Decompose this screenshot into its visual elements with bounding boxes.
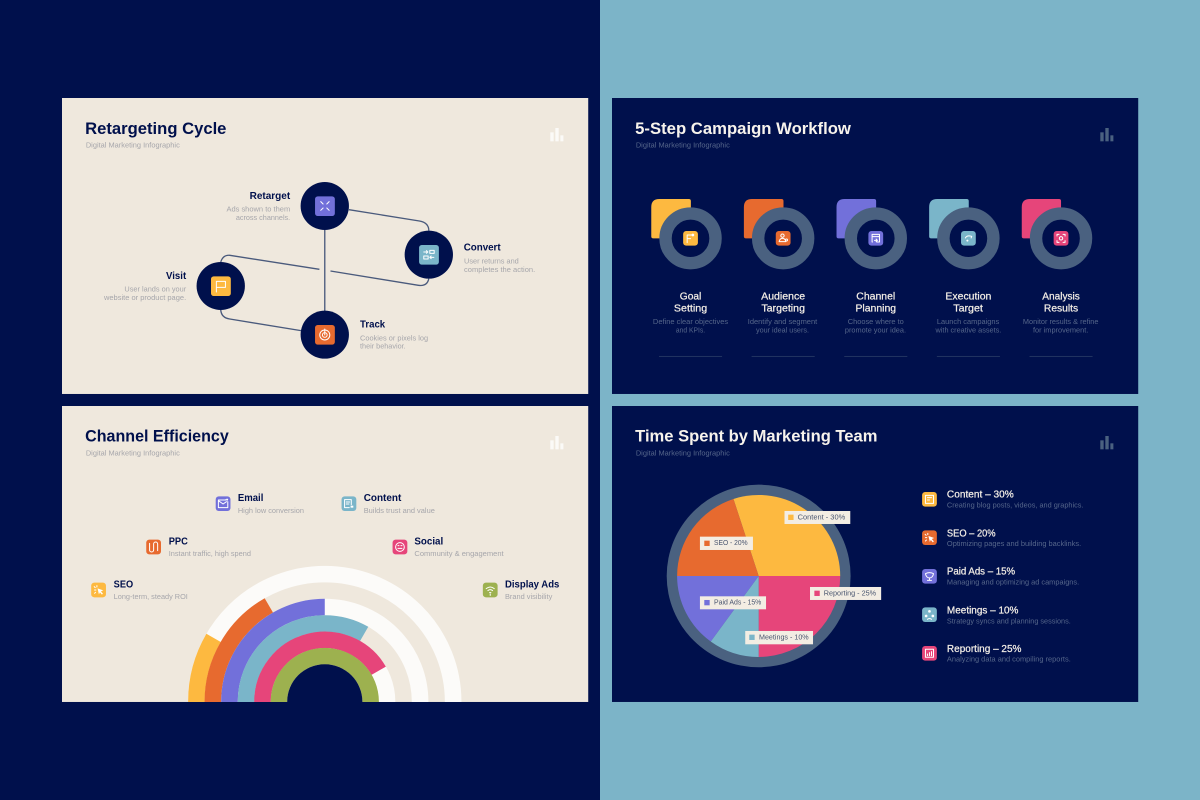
item: display ads xyxy=(483,579,559,601)
step 4: execution target: Launch campaigns xyxy=(937,317,1000,326)
subtitle: Digital Marketing Infographic xyxy=(636,141,730,150)
icon: bars xyxy=(550,436,563,449)
pie label: seo xyxy=(700,537,753,550)
legend: meetings: Strategy syncs and planning sessions. xyxy=(947,616,1071,625)
heading: 5-Step Campaign Workflow xyxy=(635,119,852,138)
node: track: their behavior. xyxy=(360,342,406,351)
node: retarget: Ads shown to them xyxy=(226,205,290,214)
concentric radial chart xyxy=(188,566,462,702)
item: ppc: Instant traffic, high spend xyxy=(169,549,251,558)
heading: Channel Efficiency xyxy=(85,427,229,446)
panel: retargeting cycle xyxy=(62,98,588,394)
item: email xyxy=(216,493,304,515)
node: track xyxy=(301,311,428,359)
pie label: paid ads: Paid Ads - 15% xyxy=(714,597,762,606)
panel: channel efficiency xyxy=(62,406,588,702)
legend: content: Content – 30% xyxy=(947,489,1014,500)
step 3: channel planning: Planning xyxy=(855,303,896,314)
icon: bars xyxy=(550,128,563,141)
item: seo: SEO xyxy=(114,579,134,590)
step 2: audience targeting: your ideal users. xyxy=(756,326,809,335)
legend: meetings xyxy=(922,605,1071,625)
step 1: goal setting: Define clear objectives xyxy=(653,317,728,326)
subtitle: Digital Marketing Infographic xyxy=(86,449,180,458)
legend: seo xyxy=(922,528,1081,548)
pie label: meetings xyxy=(745,631,813,644)
step 1: goal setting: Setting xyxy=(674,303,707,314)
step 5: analysis results: Results xyxy=(1044,303,1078,314)
node: retarget xyxy=(226,182,349,230)
step 4: execution target: Execution xyxy=(945,291,991,302)
node: visit: website or product page. xyxy=(103,293,186,302)
legend: reporting: Reporting – 25% xyxy=(947,644,1022,655)
step 1: goal setting: Goal xyxy=(680,291,701,302)
item: ppc: PPC xyxy=(169,536,188,547)
node: visit: User lands on your xyxy=(124,285,187,294)
step 2: audience targeting: Targeting xyxy=(761,303,805,314)
item: content: Content xyxy=(364,493,402,504)
item: email: Email xyxy=(238,493,263,504)
step 5: analysis results: Monitor results & refine xyxy=(1023,317,1098,326)
node: track: Track xyxy=(360,320,386,331)
heading: Retargeting Cycle xyxy=(85,119,226,138)
background: right teal half xyxy=(600,0,1200,800)
step 5: analysis results: for improvement. xyxy=(1033,326,1088,335)
legend: seo: SEO – 20% xyxy=(947,528,996,539)
pie label: meetings: Meetings - 10% xyxy=(759,632,809,641)
step 3: channel planning xyxy=(837,199,907,357)
pie label: content: Content - 30% xyxy=(798,512,846,521)
legend: content xyxy=(922,489,1084,510)
step 3: channel planning: promote your idea. xyxy=(845,326,906,335)
item: content xyxy=(342,493,435,515)
legend: paid ads: Paid Ads – 15% xyxy=(947,567,1015,578)
item: seo: Long-term, steady ROI xyxy=(114,592,188,601)
step 3: channel planning: Choose where to xyxy=(848,317,904,326)
pie chart xyxy=(667,485,881,667)
pie label: reporting: Reporting - 25% xyxy=(824,588,877,597)
item: display ads: Display Ads xyxy=(505,579,559,590)
subtitle: Digital Marketing Infographic xyxy=(86,141,180,150)
legend: paid ads xyxy=(922,567,1079,587)
step 5: analysis results: Analysis xyxy=(1042,291,1080,302)
pie label: content xyxy=(784,511,850,524)
panel: 5-step campaign workflow xyxy=(612,98,1138,394)
node: convert: User returns and xyxy=(464,256,519,265)
step 1: goal setting xyxy=(651,199,728,357)
heading: Time Spent by Marketing Team xyxy=(635,427,877,446)
item: social: Community & engagement xyxy=(414,549,504,558)
legend: content: Creating blog posts, videos, and graphics. xyxy=(947,501,1084,510)
step 2: audience targeting xyxy=(744,199,818,357)
pie label: seo: SEO - 20% xyxy=(714,538,748,547)
item: social xyxy=(393,536,504,558)
step 1: goal setting: and KPIs. xyxy=(676,326,705,335)
node: retarget: across channels. xyxy=(236,213,290,222)
icon: bars xyxy=(1100,128,1113,141)
step 4: execution target: with creative assets. xyxy=(935,326,1001,335)
node: convert: completes the action. xyxy=(464,265,535,274)
panel: time spent by marketing team xyxy=(612,406,1138,702)
node: convert: Convert xyxy=(464,243,501,254)
item: seo xyxy=(91,579,188,601)
icon: bars xyxy=(1100,436,1113,449)
node: visit: Visit xyxy=(166,271,187,282)
step 2: audience targeting: Audience xyxy=(761,291,806,302)
item: display ads: Brand visibility xyxy=(505,592,553,601)
item: ppc xyxy=(146,536,251,558)
item: email: High low conversion xyxy=(238,506,304,515)
legend: seo: Optimizing pages and building backlinks. xyxy=(947,539,1081,548)
legend: reporting xyxy=(922,644,1071,664)
step 5: analysis results xyxy=(1022,199,1098,357)
legend: meetings: Meetings – 10% xyxy=(947,605,1018,616)
subtitle: Digital Marketing Infographic xyxy=(636,449,730,458)
step 4: execution target xyxy=(929,199,1001,357)
item: social: Social xyxy=(414,536,443,547)
node: retarget: Retarget xyxy=(250,191,291,202)
step 3: channel planning: Channel xyxy=(856,291,895,302)
legend: paid ads: Managing and optimizing ad campaigns. xyxy=(947,578,1079,587)
pie label: reporting xyxy=(810,587,881,600)
node: convert xyxy=(405,231,535,279)
node: visit xyxy=(103,262,245,310)
pie label: paid ads xyxy=(700,596,766,609)
legend: reporting: Analyzing data and compiling reports. xyxy=(947,655,1071,664)
node: track: Cookies or pixels log xyxy=(360,333,428,342)
background: left navy half xyxy=(0,0,600,800)
step 2: audience targeting: Identify and segment xyxy=(748,317,818,326)
item: content: Builds trust and value xyxy=(364,506,435,515)
step 4: execution target: Target xyxy=(953,303,983,314)
cycle connector lines xyxy=(221,210,429,331)
